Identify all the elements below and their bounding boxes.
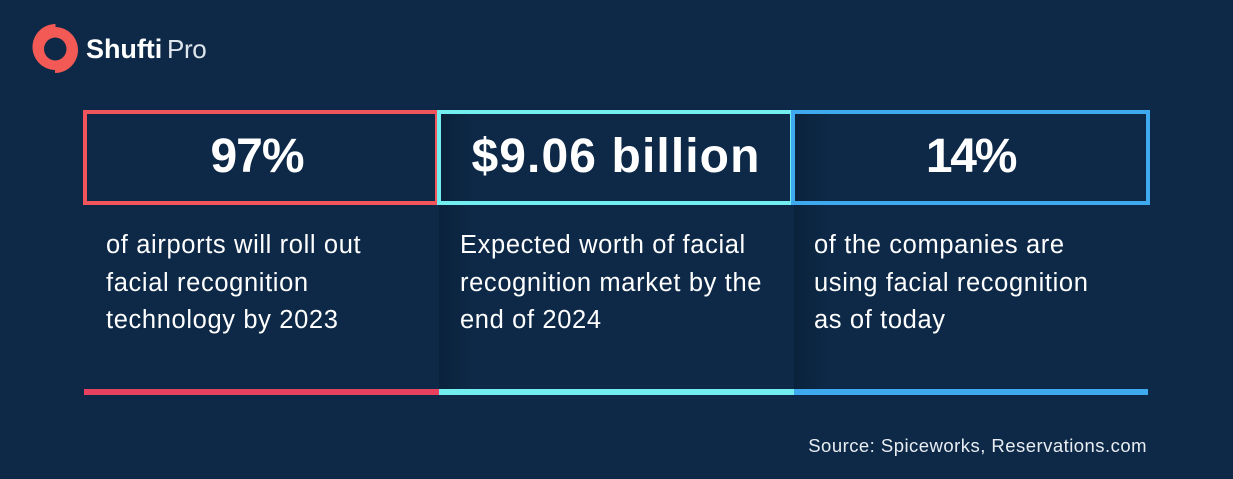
description: airports: technology by 2023	[106, 306, 339, 334]
description: companies: using facial recognition	[814, 268, 1089, 296]
description: companies: of the companies are	[814, 231, 1065, 259]
bottom bar: red	[84, 389, 439, 395]
description: market worth: recognition market by the	[460, 268, 762, 296]
description: airports	[106, 231, 361, 334]
panel: 97% airports	[83, 110, 439, 395]
bottom bar: cyan	[439, 389, 794, 395]
stat box: $9.06 billion: $9.06 billion	[471, 130, 761, 183]
description: airports: of airports will roll out	[106, 231, 361, 259]
logo: Shufti Pro	[32, 24, 206, 73]
logo wordmark: Shufti	[86, 34, 162, 64]
description: market worth: Expected worth of facial	[460, 231, 746, 259]
logo wordmark: Pro	[167, 34, 206, 64]
description: airports: facial recognition	[106, 268, 309, 296]
stat box: 14%	[791, 110, 1150, 205]
source note: Source: Spiceworks, Reservations.com	[808, 435, 1147, 456]
stat box: $9.06 billion	[437, 110, 794, 205]
description: market worth	[460, 231, 762, 334]
icon: logo ring	[32, 24, 78, 73]
stat box: 97%	[83, 110, 439, 205]
logo wordmark	[86, 34, 206, 64]
stat box: 14%: 14%	[926, 130, 1015, 183]
description: companies	[814, 231, 1089, 334]
description: market worth: end of 2024	[460, 306, 602, 334]
description: companies: as of today	[814, 306, 946, 334]
panel: $9.06 billion market	[437, 110, 794, 395]
panel: 14% companies	[791, 110, 1150, 395]
stat box: 97%: 97%	[210, 130, 304, 183]
bottom bar: blue	[794, 389, 1148, 395]
